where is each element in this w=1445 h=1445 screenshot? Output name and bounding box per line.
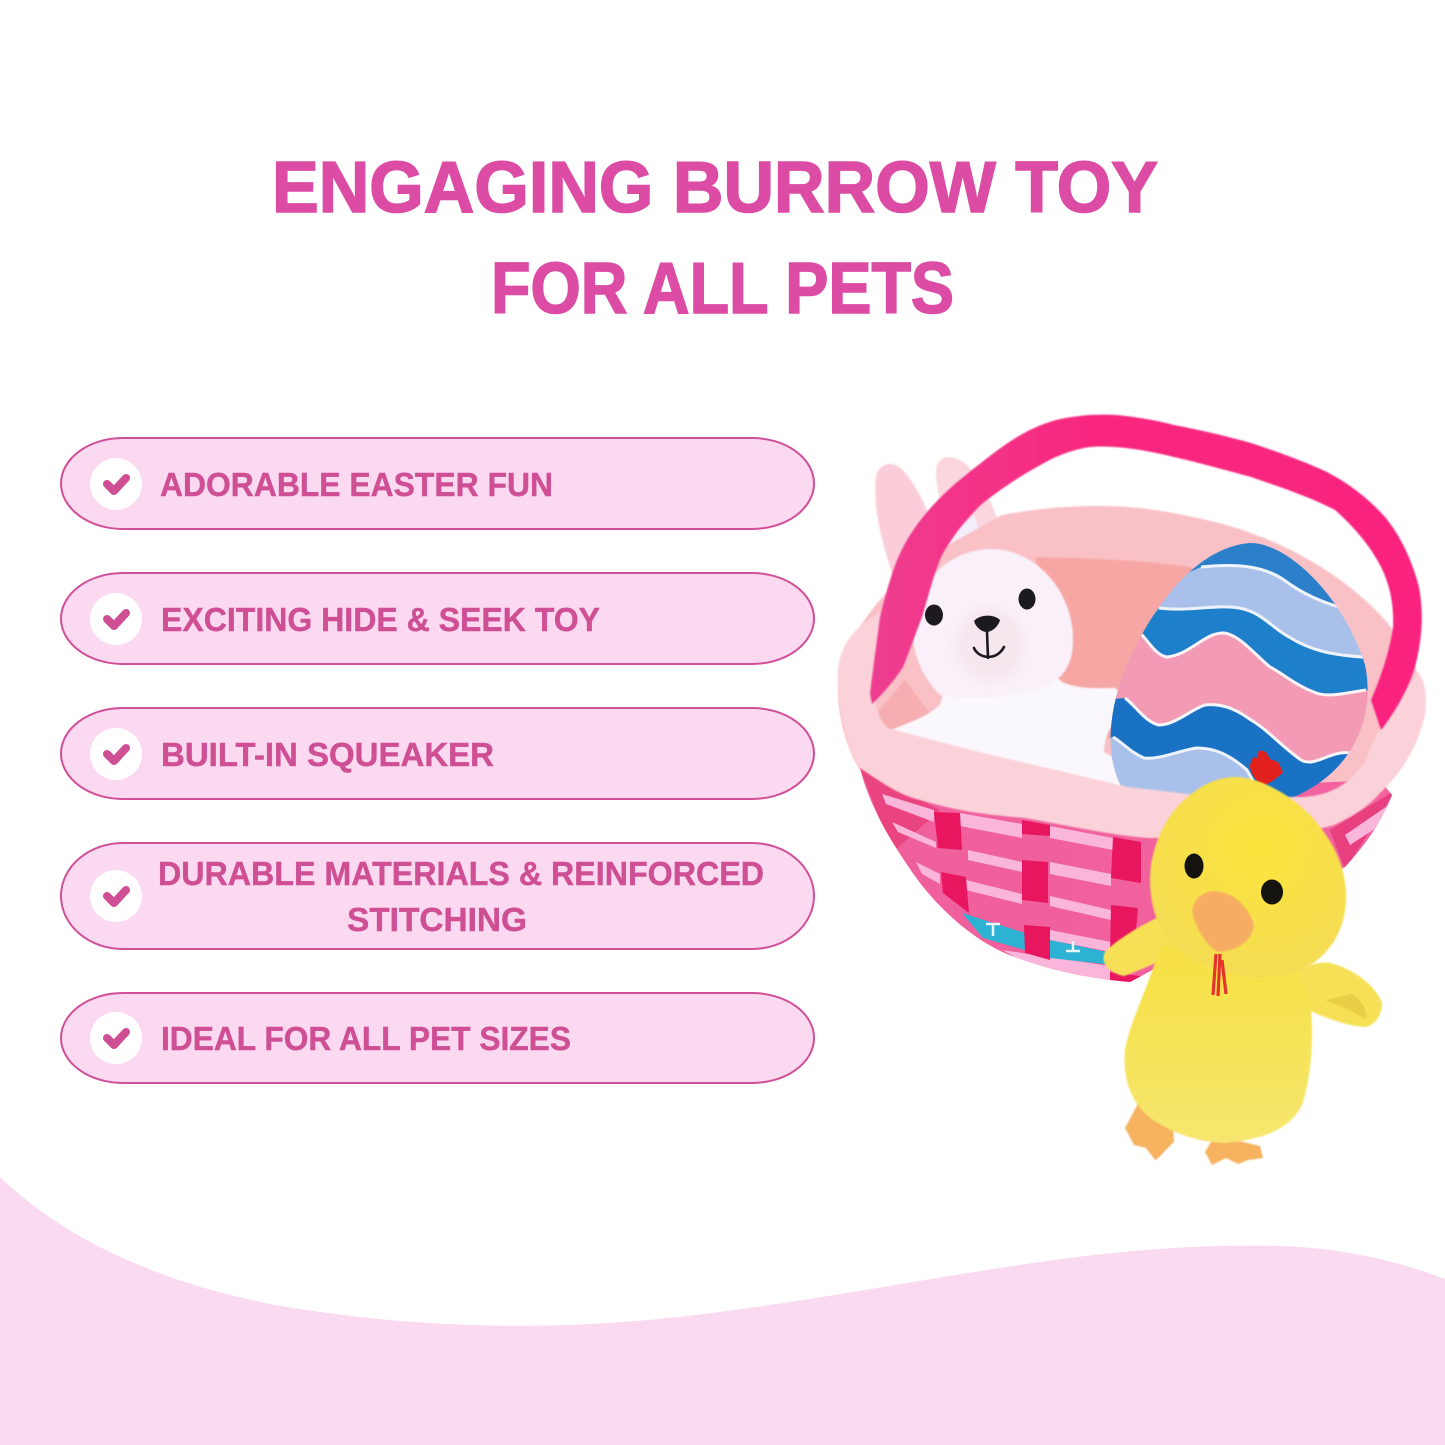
teal band (962, 913, 1112, 965)
title: FOR ALL PETS (491, 249, 954, 329)
chick body (1125, 945, 1312, 1143)
egg top band (1189, 543, 1336, 606)
feature pill: durable materials (61, 843, 814, 949)
basket front rim (838, 610, 1426, 838)
feature pill: hide and seek (61, 573, 814, 664)
basket back wall (838, 506, 1425, 840)
bowl weave (860, 768, 1392, 982)
feature pill: squeaker (61, 708, 814, 799)
basket inner panel (1035, 557, 1195, 740)
bunny (891, 549, 1126, 790)
basket inner shadow left (875, 680, 935, 735)
bunny ears (875, 457, 1008, 590)
feature pill: pet sizes: IDEAL FOR ALL PET SIZES (161, 1020, 571, 1057)
bunny head (913, 549, 1073, 698)
feature pill: adorable easter fun: ADORABLE EASTER FUN (160, 466, 553, 503)
bunny muzzle (956, 609, 1024, 681)
feature pill: durable materials: DURABLE MATERIALS & REINFORCED (158, 855, 764, 892)
product illustration: plush basket set (838, 415, 1426, 1165)
chick head (1150, 777, 1346, 978)
title: ENGAGING BURROW TOY (272, 148, 1158, 228)
chick eyes (1184, 854, 1283, 904)
feature pill: hide and seek: EXCITING HIDE & SEEK TOY (161, 601, 600, 638)
egg pink band (1114, 634, 1368, 760)
egg blue band (1140, 607, 1380, 695)
bunny face (925, 588, 1036, 658)
chick wings (1104, 912, 1382, 1027)
feature list (61, 438, 814, 1083)
feature pill: pet sizes (61, 993, 814, 1083)
easter egg (1110, 543, 1368, 798)
feature pill: squeaker: BUILT-IN SQUEAKER (161, 736, 494, 773)
egg lower blue band (1110, 698, 1349, 798)
background wave (0, 1177, 1445, 1445)
chick wattle (1213, 954, 1226, 996)
basket handle (870, 415, 1422, 730)
chick feet (1125, 1098, 1263, 1165)
chick (1104, 750, 1382, 1165)
title (272, 148, 1158, 329)
feature pill: adorable easter fun (61, 438, 814, 529)
chick beak (1192, 891, 1254, 952)
bunny body (891, 670, 1126, 790)
feature pill: durable materials: STITCHING (347, 901, 527, 938)
chick comb (1250, 750, 1283, 786)
